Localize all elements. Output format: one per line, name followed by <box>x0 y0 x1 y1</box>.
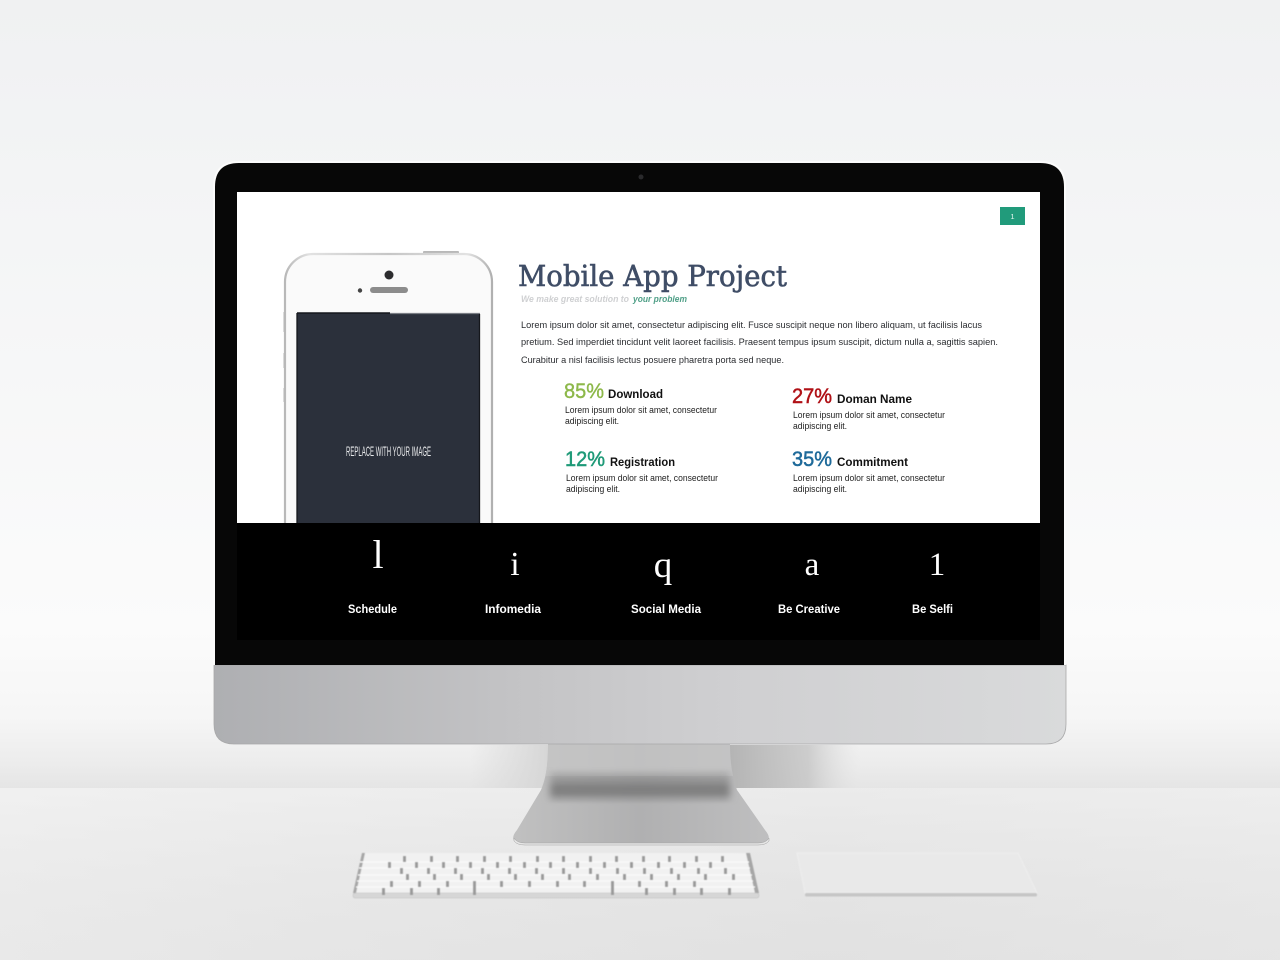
stat: 85% download: Download <box>608 387 663 401</box>
stat: 12% registration: Registration <box>610 455 675 469</box>
stat: 35% commitment: Commitment <box>837 455 908 469</box>
phone sensor dot <box>358 288 362 293</box>
feature: be selfi: Be Selfi <box>912 602 953 616</box>
phone mockup <box>283 251 494 523</box>
phone camera <box>384 270 394 280</box>
intro paragraph: Curabitur a nisl facilisis lectus posuere pharetra porta sed neque. <box>521 355 784 366</box>
stat: 27% domain name: adipiscing elit. <box>793 421 847 431</box>
feature: social media <box>631 545 701 616</box>
stat: 35% commitment <box>792 448 945 494</box>
feature: be creative: a <box>805 547 820 583</box>
phone speaker <box>370 287 408 293</box>
stat: 85% download <box>564 380 717 426</box>
stat: 85% download: Lorem ipsum dolor sit amet, consectetur <box>565 405 717 415</box>
feature: social media: Social Media <box>631 602 701 616</box>
stat: 12% registration: 12% <box>565 448 605 471</box>
phone top button <box>423 251 459 253</box>
feature: schedule: Schedule <box>348 602 397 616</box>
feature: be creative: Be Creative <box>778 602 840 616</box>
stat: 27% domain name: 27% <box>792 385 832 408</box>
phone screen: REPLACE WITH YOUR IMAGE <box>346 443 431 459</box>
monitor bezel <box>213 161 1066 665</box>
page number badge: 1 <box>1010 212 1015 221</box>
monitor chin <box>214 665 1066 744</box>
webcam <box>638 174 644 180</box>
stat: 85% download: adipiscing elit. <box>565 416 619 426</box>
phone body <box>284 252 494 523</box>
stat: 12% registration: Lorem ipsum dolor sit amet, consectetur <box>566 473 718 483</box>
trackpad <box>797 853 1037 896</box>
black feature band <box>237 523 1040 640</box>
page number badge <box>1000 207 1025 225</box>
feature: schedule <box>348 532 397 616</box>
slide background <box>237 192 1040 523</box>
monitor stand <box>500 744 780 845</box>
feature: social media: q <box>654 545 672 586</box>
feature: infomedia <box>485 546 541 616</box>
stat: 35% commitment: adipiscing elit. <box>793 484 847 494</box>
feature: infomedia: Infomedia <box>485 602 541 616</box>
phone screen <box>297 313 480 528</box>
stat: 27% domain name <box>792 385 945 431</box>
stat: 27% domain name: Lorem ipsum dolor sit amet, consectetur <box>793 410 945 420</box>
feature: be selfi: 1 <box>929 547 945 583</box>
intro paragraph: pretium. Sed imperdiet tincidunt velit laoreet facilisis. Praesent tempus ipsum suscipit, dictum nulla a, sagittis sapien. <box>521 337 998 348</box>
stat: 12% registration <box>565 448 718 494</box>
stat: 85% download: 85% <box>564 380 604 403</box>
feature: infomedia: i <box>510 546 520 583</box>
keyboard <box>353 853 759 898</box>
title: Mobile App Project <box>518 259 787 293</box>
intro paragraph <box>521 320 998 366</box>
stat: 27% domain name: Doman Name <box>837 392 912 406</box>
subtitle: We make great solution to <box>521 294 629 305</box>
feature: schedule: l <box>372 532 384 577</box>
intro paragraph: Lorem ipsum dolor sit amet, consectetur adipiscing elit. Fusce suscipit neque non libero aliquam, ut facilisis lacus <box>521 320 982 331</box>
feature: be creative <box>778 547 840 616</box>
subtitle: your problem <box>632 294 687 305</box>
stat: 35% commitment: Lorem ipsum dolor sit amet, consectetur <box>793 473 945 483</box>
stat: 12% registration: adipiscing elit. <box>566 484 620 494</box>
phone volume buttons <box>283 312 284 402</box>
feature: be selfi <box>912 547 953 616</box>
stat: 35% commitment: 35% <box>792 448 832 471</box>
